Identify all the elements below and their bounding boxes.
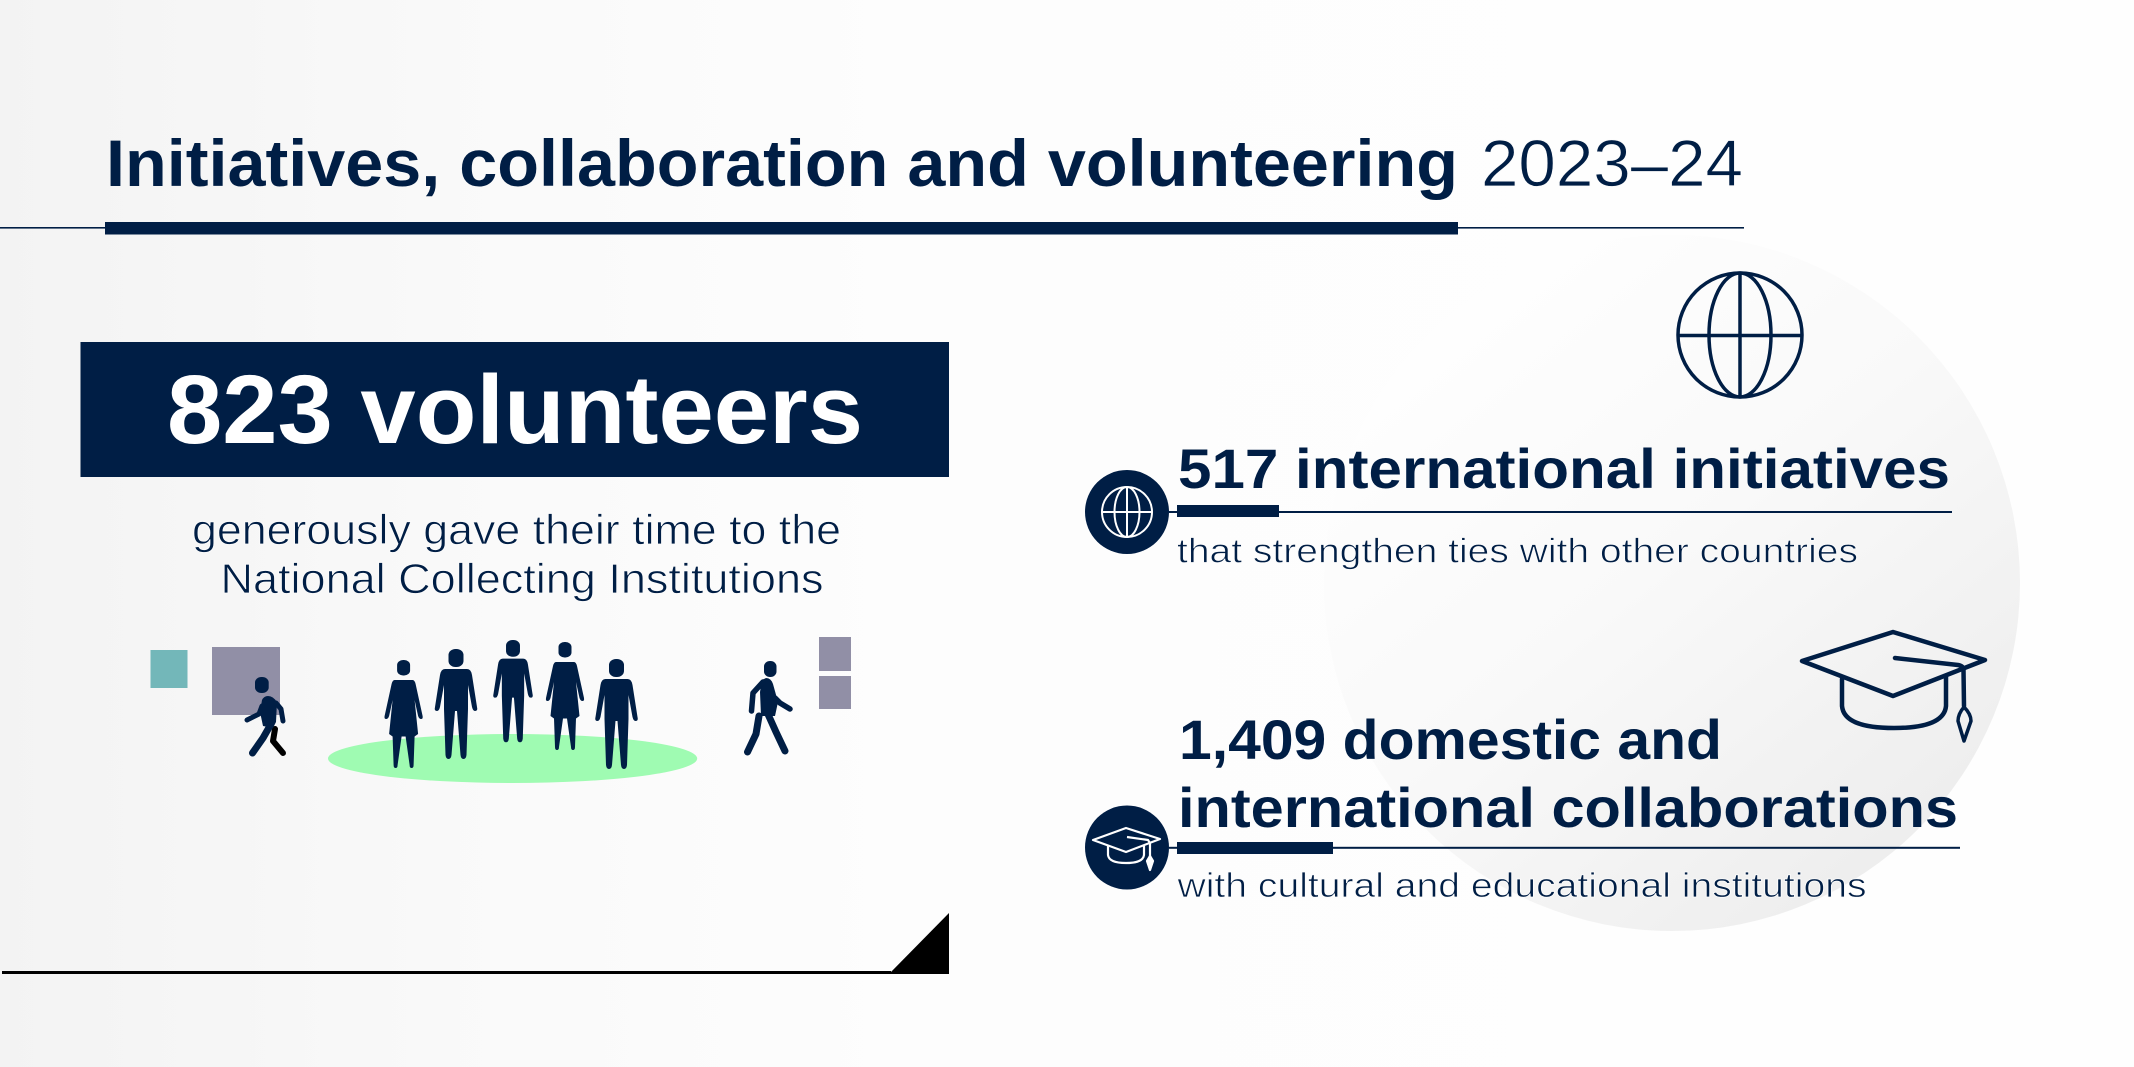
title: Initiatives, collaboration and volunteering (106, 126, 1458, 200)
title rule (0, 222, 1744, 234)
person: man centre (493, 640, 533, 742)
volunteers banner: 823 volunteers (167, 355, 863, 464)
green floor ellipse (328, 734, 697, 783)
volunteers banner (80, 342, 949, 477)
subtext: with cultural and educational institutions (1176, 867, 1866, 905)
person: walker left (247, 677, 283, 753)
person: woman left (384, 660, 423, 768)
icon: large graduation cap (1802, 632, 1985, 741)
background circle (1324, 235, 2020, 931)
rule (1169, 842, 1960, 854)
person: woman right (546, 642, 584, 750)
heading: 517: 517 international initiatives (1178, 437, 1950, 500)
person: man right (595, 659, 638, 769)
person: walker right (748, 661, 790, 752)
volunteers description (192, 506, 841, 602)
rule (1169, 505, 1952, 517)
heading: 1,409 (1178, 708, 1958, 839)
title block (0, 126, 1744, 234)
title year: 2023–24 (1481, 126, 1743, 200)
panel: international initiatives (1085, 437, 1952, 570)
panel: collaborations (1085, 708, 1960, 905)
volunteers description: generously gave their time to the (192, 506, 841, 553)
panel: volunteers (2, 342, 949, 974)
heading: 1,409: international collaborations (1178, 776, 1958, 839)
icon: small cap badge (1085, 806, 1169, 890)
person: man second (435, 649, 477, 759)
volunteers description: National Collecting Institutions (220, 555, 824, 602)
icon: large globe (1678, 273, 1802, 397)
subtext: that strengthen ties with other countries (1177, 532, 1858, 570)
corner baseline (2, 913, 949, 974)
illustration: gallery visitors (150, 637, 851, 783)
artwork squares (150, 637, 851, 715)
icon: small globe badge (1085, 470, 1169, 554)
heading: 1,409: 1,409 domestic and (1179, 708, 1722, 771)
